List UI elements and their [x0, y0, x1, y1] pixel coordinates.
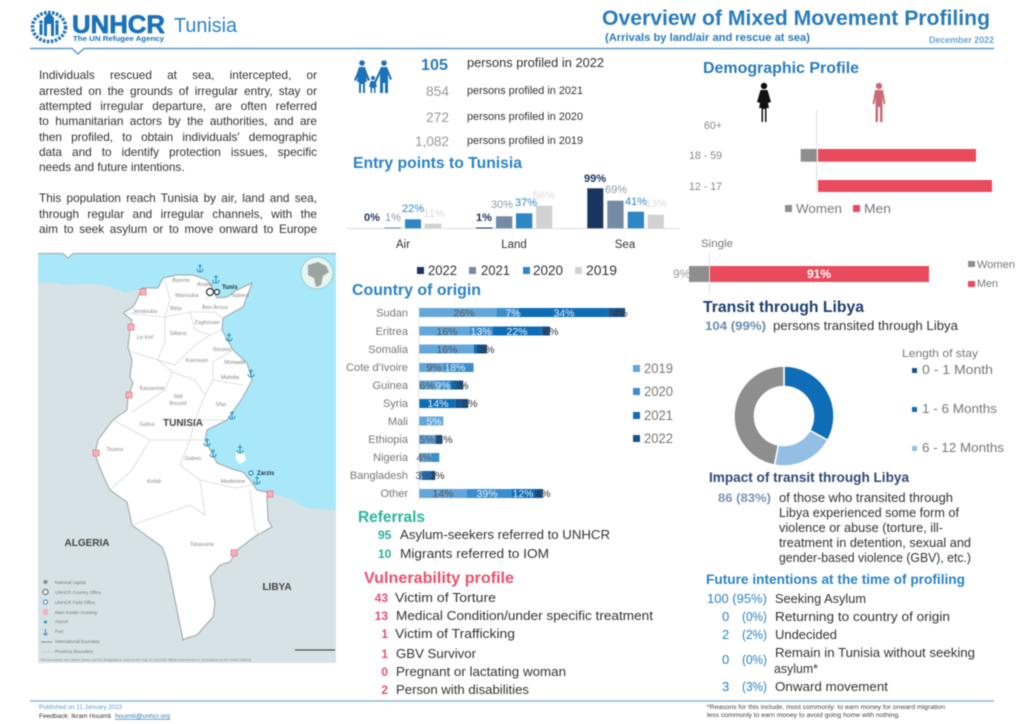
text block: introduction paragraph one: arrested on the grounds of irregular entry, stay or: [39, 84, 317, 98]
map: port markers: [197, 264, 260, 484]
map: province labels: Mahdia: [221, 375, 240, 381]
bar value labels: 5%: [462, 398, 478, 410]
chart value labels: 37%: [515, 197, 537, 209]
stat: profiled 2021: [426, 83, 583, 99]
pyramid legend: Men: [864, 201, 891, 216]
panel: impact of transit: treatment in detention, sexual and: [779, 536, 971, 550]
bar value labels: 14%: [427, 398, 449, 410]
bar value labels: 9%: [435, 380, 451, 392]
country labels: Somalia: [368, 344, 409, 356]
map: legend: Airport: [55, 619, 69, 624]
map: neighbouring country labels: ALGERIA: [64, 538, 110, 549]
country labels: Guinea: [373, 380, 409, 392]
panel: impact of transit: violence or abuse (torture, ill-: [779, 521, 943, 535]
pyramid legend: Women: [796, 201, 842, 216]
map: office markers: [206, 288, 253, 475]
map: province labels: Medenine: [221, 479, 245, 485]
stat: profiled 2022: persons profiled in 2022: [467, 55, 604, 70]
donut legend: [902, 348, 1005, 455]
map: province boundaries: [110, 280, 262, 535]
footnote: [707, 704, 945, 719]
chart legend: 2022: [428, 262, 457, 278]
map: office labels: Tunis: [222, 285, 238, 291]
bar value labels: 3%: [437, 434, 453, 446]
map: legend: [41, 580, 102, 654]
map: legend: National capital: [55, 580, 86, 585]
map: legend: International boundary: [55, 639, 101, 644]
stat: profiled 2020: 272: [426, 109, 449, 125]
text block: introduction paragraph two: through regular and irregular channels, with the: [39, 207, 317, 221]
country name: Tunisia: [174, 15, 238, 37]
country labels: Sudan: [376, 308, 408, 320]
footer: publication info: houimli@unhcr.org: [115, 713, 170, 720]
panel: future intentions: Undecided: [775, 627, 837, 642]
panel: future intentions: 2: [722, 627, 729, 642]
footnote: less commonly to earn money to avoid going home with nothing.: [707, 712, 900, 719]
bar value labels: 4%: [416, 452, 432, 464]
panel: vulnerability profile: Pregnant or lactating woman: [396, 664, 566, 679]
chart value labels: 13%: [645, 198, 667, 210]
bar value labels: 3%: [453, 380, 469, 392]
bar value labels: 22%: [506, 326, 528, 338]
stat: profiled 2019: 1,082: [415, 133, 449, 149]
text block: introduction paragraph one: Individuals rescued at sea, intercepted, or: [39, 68, 317, 82]
map: office labels: [222, 285, 275, 477]
logo wordmark: UNHCR: [72, 11, 165, 39]
map: province labels: Zaghouan: [194, 320, 220, 326]
map: legend: Port: [55, 629, 64, 634]
footer: publication info: Feedback: Ikram Houimli: [39, 713, 111, 720]
single legend: Men: [977, 278, 998, 290]
map: neighbouring country labels: LIBYA: [262, 582, 292, 593]
text block: introduction paragraph one: data and to identify protection issues, specific: [39, 145, 317, 159]
chart value labels: 11%: [423, 208, 445, 220]
chart value labels: 1%: [476, 212, 492, 224]
country labels: Eritrea: [376, 326, 409, 338]
chart: age and sex pyramid: [689, 110, 992, 216]
chart: single status: 91%: [807, 267, 831, 281]
panel: future intentions: 3: [722, 679, 729, 694]
chart: single status: Single: [701, 238, 733, 250]
panel: impact of transit: 86 (83%): [718, 491, 771, 505]
map: province labels: Kasserine: [140, 386, 164, 392]
chart legend: 2019: [586, 262, 617, 278]
map: neighbouring country labels: [64, 418, 292, 593]
panel: vulnerability profile: [364, 570, 653, 697]
panel: referrals: [358, 509, 610, 561]
bar value labels: 18%: [444, 362, 466, 374]
heading: demographic profile: Demographic Profile: [703, 60, 859, 77]
map: scale bar: [295, 649, 335, 651]
map: province labels: Tataouine: [190, 542, 214, 548]
text block: introduction paragraph one: to humanitarian actors by the authorities, and are: [39, 114, 317, 128]
text block: introduction paragraph one: [38, 68, 318, 174]
country labels: Other: [380, 488, 408, 500]
panel: vulnerability profile: Victim of Trafficking: [395, 626, 515, 641]
donut legend: Length of stay: [902, 348, 979, 360]
bar legend: 2020: [644, 383, 673, 399]
bar value labels: 12%: [512, 488, 534, 500]
stat: profiled 2020: persons profiled in 2020: [467, 111, 583, 123]
stat: transited: persons transited through Libya: [773, 319, 958, 333]
chart: single status: [673, 238, 1015, 293]
panel: map of Tunisia: [38, 254, 336, 663]
panel: impact of transit: Libya experienced some form of: [779, 506, 960, 520]
heading: referrals: Referrals: [358, 509, 425, 526]
footnote: *Reasons for this include, most commonly: to earn money for onward migration: [707, 704, 945, 711]
bar value labels: 14%: [432, 488, 454, 500]
chart: single status: 9%: [673, 267, 691, 281]
map: province labels: Tozeur: [107, 447, 124, 453]
map: province labels: [107, 278, 249, 548]
panel: vulnerability profile: 0: [381, 665, 388, 679]
chart value labels: 69%: [605, 184, 627, 196]
map top notch: [38, 254, 336, 258]
panel: vulnerability profile: 13: [375, 609, 388, 623]
stat: profiled 2021: persons profiled in 2021: [467, 85, 583, 97]
panel: future intentions: Returning to country of origin: [775, 609, 950, 624]
chart legend: 2020: [533, 262, 563, 278]
bar value labels: 3%: [415, 470, 431, 482]
panel: future intentions: 0: [722, 609, 729, 624]
2022 segments: [431, 308, 625, 498]
chart value labels: 0%: [364, 212, 380, 224]
map: border crossing markers: [93, 289, 273, 556]
bar value labels: [415, 308, 628, 500]
text block: introduction paragraph two: This population reach Tunisia by air, land and sea,: [39, 191, 317, 205]
text block: introduction paragraph two: [38, 191, 318, 236]
stat: profiled 2022: [421, 55, 604, 74]
age labels: [689, 120, 722, 193]
chart value labels: 41%: [625, 196, 647, 208]
heading: vulnerability: Vulnerability profile: [364, 570, 514, 587]
panel: future intentions: Onward movement: [775, 679, 888, 694]
heading: entry points: Entry points to Tunisia: [353, 155, 522, 172]
bar legend: 2021: [644, 407, 673, 423]
panel: vulnerability profile: 1: [381, 647, 388, 661]
panel: vulnerability profile: Victim of Torture: [395, 590, 496, 605]
donut legend: 1 - 6 Months: [922, 401, 998, 416]
map: office labels: Zarzis: [257, 471, 275, 477]
chart value labels: 22%: [402, 203, 424, 215]
bar value labels: 3%: [429, 470, 445, 482]
icon: UNHCR logo: [32, 12, 66, 42]
map: legend: UNHCR Country Office: [55, 590, 102, 595]
panel: future intentions: (3%): [742, 679, 767, 694]
chart categories: Sea: [615, 239, 636, 251]
bar value labels: 34%: [553, 308, 575, 320]
bar value labels: 4%: [535, 488, 551, 500]
map: province labels: Sfax: [215, 402, 227, 408]
age labels: 60+: [704, 120, 722, 132]
map: province labels: Jendouba: [133, 309, 158, 315]
bar value labels: 5%: [419, 434, 435, 446]
panel: referrals: Migrants referred to IOM: [400, 546, 549, 561]
bar value labels: 3%: [479, 344, 495, 356]
map: province labels: Sousse: [213, 347, 231, 353]
chart legend: 2021: [481, 262, 510, 278]
chart: country of origin bars: [346, 306, 673, 500]
panel: vulnerability profile: Person with disabilities: [396, 682, 529, 697]
map: province labels: Bizerte: [172, 278, 190, 284]
age labels: 18 - 59: [689, 150, 722, 162]
donut legend: 6 - 12 Months: [922, 440, 1005, 455]
2020 segments: [431, 308, 518, 498]
map: Djerba island: [236, 452, 246, 464]
text block: introduction paragraph one: then profiled, to obtain individuals' demographic: [39, 130, 317, 144]
panel: future intentions: 0: [722, 652, 729, 667]
panel: future intentions: 100 (95%): [707, 591, 767, 606]
text block: introduction paragraph one: attempted irregular departure, are often referred: [39, 99, 317, 113]
panel: vulnerability profile: GBV Survivor: [396, 646, 477, 661]
chart legend: [417, 262, 617, 278]
stat: transited: [705, 319, 958, 333]
bar value labels: 6%: [543, 326, 559, 338]
map: legend: Province Boundary: [55, 649, 94, 654]
2019 segments: [419, 308, 496, 498]
bar value labels: 4%: [612, 308, 628, 320]
chart value labels: 1%: [385, 212, 401, 224]
country labels: Nigeria: [373, 452, 409, 464]
map: province labels: Ben Arous: [202, 305, 228, 311]
map: locator globe: [301, 257, 333, 289]
text block: introduction paragraph two: aim to seek asylum or to move onward to Europe: [39, 222, 317, 236]
panel: vulnerability profile: Medical Condition/under specific treatment: [396, 608, 653, 623]
bar legend: 2022: [644, 430, 673, 446]
heading: country of origin: Country of origin: [352, 282, 481, 299]
map: province labels: Gabes: [185, 456, 201, 462]
chart categories: [396, 239, 636, 251]
bar legend: 2019: [644, 360, 673, 376]
map: province labels: Manouba: [175, 293, 200, 299]
stat: profiled 2022: 105: [421, 57, 448, 74]
donut legend: 0 - 1 Month: [922, 362, 993, 377]
panel: referrals: 95: [378, 528, 392, 542]
bar value labels: 9%: [426, 362, 442, 374]
map: province labels: Sidi: [173, 394, 183, 400]
map: province labels: Nabeul: [231, 293, 249, 299]
bar value labels: 5%: [426, 416, 442, 428]
icon: woman: [757, 83, 771, 122]
map: province labels: Bouzid: [169, 401, 187, 407]
pyramid legend: [785, 201, 891, 216]
map: province labels: Gafsa: [140, 422, 155, 428]
panel: impact of transit: gender-based violence (GBV), etc.): [779, 551, 971, 565]
bar value labels: 39%: [476, 488, 498, 500]
chart: length of stay donut: [734, 366, 834, 466]
single legend: Women: [977, 259, 1015, 271]
stat: transited: 104 (99%): [705, 319, 766, 333]
panel: impact of transit: [709, 469, 971, 565]
chart value labels: [364, 173, 667, 224]
bar value labels: 6%: [419, 380, 435, 392]
country labels: [346, 308, 409, 500]
bar value labels: 16%: [436, 344, 458, 356]
stat: profiled 2021: 854: [426, 83, 449, 99]
chart value labels: 56%: [533, 190, 555, 202]
map: province labels: Kebili: [147, 479, 161, 485]
panel: vulnerability profile: 1: [381, 627, 388, 641]
subtitle: (Arrivals by land/air and rescue at sea): [605, 32, 810, 44]
panel: future intentions: [706, 571, 975, 694]
stat: profiled 2020: [426, 109, 583, 125]
panel: vulnerability profile: 43: [375, 591, 388, 605]
footer rule: [30, 700, 994, 702]
map: disclaimer: The boundaries and names shown and the designations used on this map do not imply official endorsement or acceptance by the United Nations.: [40, 658, 252, 662]
panel: impact of transit: of those who transited through: [779, 491, 953, 505]
map: province labels: Monastir: [224, 360, 246, 366]
bar legend: [633, 360, 673, 446]
heading: impact: Impact of transit through Libya: [709, 469, 909, 485]
map: province labels: Siliana: [170, 331, 187, 337]
text block: introduction paragraph one: needs and future intentions.: [39, 160, 185, 174]
panel: future intentions: (0%): [742, 652, 767, 667]
stat: profiled 2019: persons profiled in 2019: [467, 135, 583, 147]
country labels: Syria: [383, 398, 409, 410]
panel: referrals: 10: [378, 547, 392, 561]
single legend: [968, 259, 1015, 290]
chart categories: Air: [396, 239, 410, 251]
country labels: Mali: [388, 416, 408, 428]
stat: profiled 2019: [415, 133, 583, 149]
2021 segments: [419, 308, 608, 498]
country labels: Cote d'Ivoire: [346, 362, 408, 374]
age labels: 12 - 17: [689, 181, 722, 193]
map: province labels: Kairouan: [186, 358, 208, 364]
map: province labels: Ariana: [197, 282, 214, 288]
panel: future intentions: Seeking Asylum: [775, 591, 866, 606]
panel: future intentions: (2%): [742, 627, 767, 642]
map: province labels: Béja: [170, 306, 182, 312]
icon: family: [354, 60, 392, 93]
map: legend: Main border crossing: [55, 610, 98, 615]
chart categories: Land: [501, 239, 527, 251]
panel: vulnerability profile: 2: [381, 683, 388, 697]
map: neighbouring country labels: TUNISIA: [163, 418, 203, 429]
panel: future intentions: asylum*: [774, 661, 818, 676]
heading: future intentions: Future intentions at the time of profiling: [706, 571, 965, 587]
logo wordmark: The UN Refugee Agency: [73, 34, 165, 43]
country labels: Ethiopia: [368, 434, 409, 446]
country labels: Bangladesh: [350, 470, 408, 482]
chart value labels: 99%: [584, 173, 606, 185]
header rule: [30, 48, 994, 54]
map: Tunisia territory: [95, 275, 272, 640]
panel: future intentions: (0%): [742, 609, 767, 624]
bar value labels: 7%: [505, 308, 521, 320]
date: December 2022: [929, 35, 994, 46]
footer: publication info: [39, 704, 170, 720]
chart: entry points bars: [346, 173, 680, 278]
bar value labels: 13%: [470, 326, 492, 338]
icon: man: [872, 83, 886, 122]
title: Overview of Mixed Movement Profiling: [602, 7, 990, 30]
map: legend: UNHCR Field Office: [55, 600, 96, 605]
footer: publication info: Published on 11 January 2023: [39, 704, 122, 711]
bar value labels: 26%: [453, 308, 475, 320]
panel: future intentions: Remain in Tunisia without seeking: [775, 645, 975, 660]
map: province labels: Le Kef: [137, 335, 154, 341]
heading: transit through Libya: Transit through Libya: [703, 299, 864, 316]
bar value labels: 16%: [436, 326, 458, 338]
panel: referrals: Asylum-seekers referred to UNHCR: [400, 527, 610, 542]
chart value labels: 30%: [491, 199, 513, 211]
